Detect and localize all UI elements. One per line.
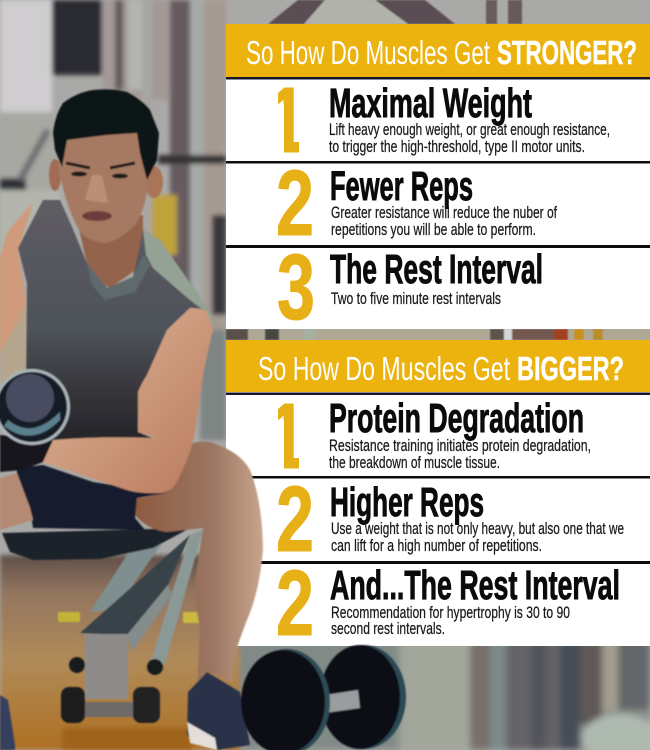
item: the rest interval: 3: [277, 235, 315, 339]
header band: bigger: So How Do Muscles Get: [258, 351, 510, 388]
ears: [49, 159, 61, 191]
left shoe: [0, 695, 15, 750]
face: [58, 130, 147, 243]
white list background: stronger: [226, 77, 650, 329]
header band: stronger: [226, 24, 650, 77]
header band: stronger: So How Do Muscles Get: [246, 35, 490, 72]
item: maximal weight: Maximal Weight: [329, 80, 532, 126]
item: higher reps: 2: [276, 467, 314, 571]
floor dumbbell: [241, 645, 406, 750]
tank top: [18, 200, 216, 442]
shorts: [17, 465, 167, 530]
shirt shoulder panel: [143, 230, 216, 335]
neck: [78, 215, 143, 288]
item: fewer reps: 2: [276, 151, 314, 255]
item: higher reps: Higher Reps: [330, 479, 484, 525]
item: protein degradation: 1: [268, 384, 306, 488]
floor: [0, 555, 240, 750]
panel: how muscles get stronger: [226, 24, 650, 339]
right lower leg and thigh: [135, 442, 263, 692]
item: fewer reps: Greater resistance will reduce the nuber of: [331, 203, 557, 222]
eyes and brows: [66, 163, 135, 221]
lower right blurred gym: [226, 640, 650, 750]
top beams: [268, 0, 522, 24]
item: higher reps: [276, 467, 624, 571]
shirt collar: [87, 255, 150, 300]
item: and the rest interval: [276, 551, 620, 655]
item: fewer reps: Fewer Reps: [330, 163, 473, 209]
item: the rest interval: The Rest Interval: [330, 246, 543, 292]
item: maximal weight: 1: [268, 68, 306, 172]
item: the rest interval: [277, 235, 543, 339]
left thigh: [0, 473, 33, 530]
item: higher reps: can lift for a high number of repetitions.: [331, 536, 542, 555]
hair: [53, 89, 159, 180]
photo: man seated on bench with dumbbell: [0, 89, 406, 750]
item: and the rest interval: 2: [276, 551, 314, 655]
item: fewer reps: [276, 151, 557, 255]
header band: bigger: [226, 340, 650, 392]
item: protein degradation: [278, 402, 590, 468]
item: maximal weight: [278, 87, 610, 156]
white list background: bigger: [226, 392, 650, 646]
item: the rest interval: Two to five minute rest intervals: [331, 289, 501, 308]
right arm flexed: [43, 308, 212, 493]
left arm: [0, 203, 33, 353]
item: fewer reps: repetitions you will be able to perform.: [331, 220, 536, 239]
dumbbell in hand: [0, 369, 70, 472]
strip between panels: [226, 329, 650, 340]
right ear: [145, 166, 163, 198]
weight bench: [2, 528, 203, 723]
item: and the rest interval: second rest intervals.: [331, 619, 445, 638]
right shoe: [187, 672, 250, 750]
panel: how muscles get bigger: [226, 340, 650, 655]
item: protein degradation: the breakdown of muscle tissue.: [329, 453, 500, 472]
